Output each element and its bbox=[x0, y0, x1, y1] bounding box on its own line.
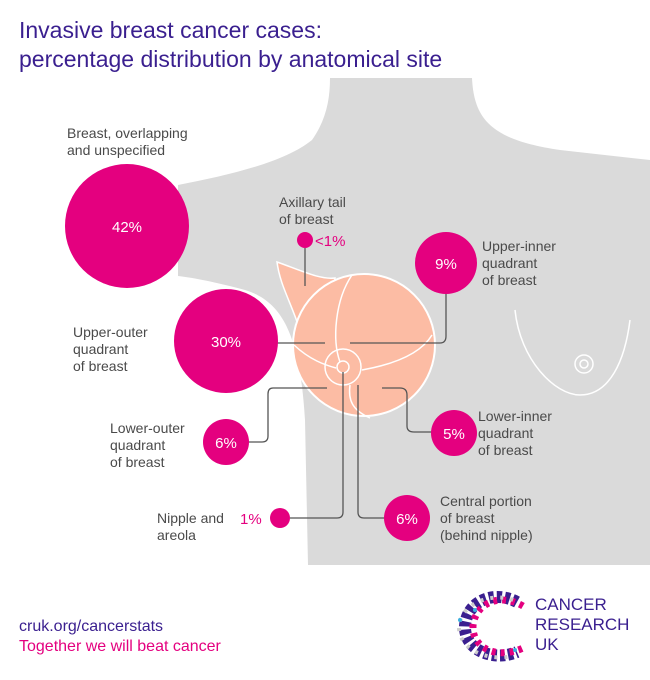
footer text bbox=[19, 618, 221, 655]
labels: and unspecified bbox=[67, 142, 165, 158]
right breast outline bbox=[515, 310, 630, 395]
footer text: Together we will beat cancer bbox=[19, 638, 221, 655]
values: 30% bbox=[211, 334, 241, 351]
text: Upper-inner bbox=[482, 238, 556, 254]
values: 6% bbox=[215, 435, 237, 452]
text: of breast bbox=[73, 358, 127, 374]
footer text: cruk.org/cancerstats bbox=[19, 618, 163, 635]
text: of breast bbox=[279, 211, 333, 227]
values: 5% bbox=[443, 426, 465, 443]
diagram: 1% bbox=[240, 511, 262, 528]
labels bbox=[67, 125, 188, 158]
text: Nipple and bbox=[157, 510, 224, 526]
text: Upper-outer bbox=[73, 324, 148, 340]
text: quadrant bbox=[110, 437, 165, 453]
values bbox=[112, 219, 465, 528]
text: of breast bbox=[482, 272, 536, 288]
circles bbox=[65, 164, 477, 541]
logo: RESEARCH bbox=[535, 615, 629, 634]
text: Lower-inner bbox=[478, 408, 552, 424]
breast diagram bbox=[277, 262, 435, 418]
values: 6% bbox=[396, 511, 418, 528]
text: of breast bbox=[478, 442, 532, 458]
diagram: <1% bbox=[315, 233, 345, 250]
title bbox=[19, 17, 442, 72]
text: quadrant bbox=[478, 425, 533, 441]
torso silhouette bbox=[178, 78, 650, 565]
text: of breast bbox=[440, 510, 494, 526]
text: (behind nipple) bbox=[440, 527, 533, 543]
title: percentage distribution by anatomical site bbox=[19, 46, 442, 72]
text: Central portion bbox=[440, 493, 532, 509]
logo bbox=[457, 591, 629, 662]
title: Invasive breast cancer cases: bbox=[19, 17, 322, 43]
labels: Breast, overlapping bbox=[67, 125, 188, 141]
text: areola bbox=[157, 527, 196, 543]
text: of breast bbox=[110, 454, 164, 470]
logo: CANCER bbox=[535, 595, 607, 614]
text: quadrant bbox=[73, 341, 128, 357]
text: Lower-outer bbox=[110, 420, 185, 436]
connector lines bbox=[248, 248, 446, 518]
values: 42% bbox=[112, 219, 142, 236]
values: 9% bbox=[435, 256, 457, 273]
text: Axillary tail bbox=[279, 194, 346, 210]
text: quadrant bbox=[482, 255, 537, 271]
logo: UK bbox=[535, 635, 559, 654]
